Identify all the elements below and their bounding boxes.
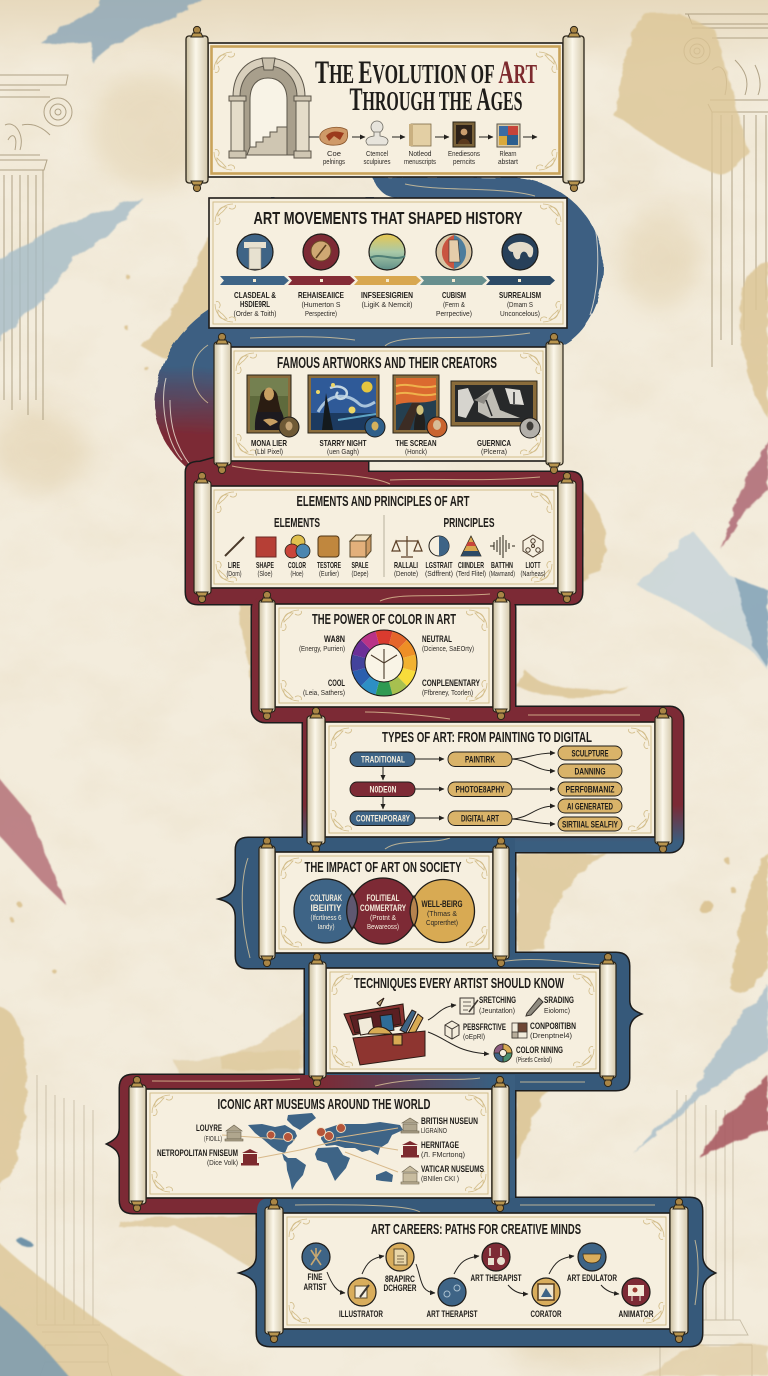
museum labels [157, 1116, 484, 1183]
heading: ART CAREERS: PATHS FOR CREATIVE MINDS [371, 1221, 581, 1238]
scroll roller left [129, 1076, 146, 1212]
scroll roller right [558, 472, 576, 603]
heading: FAMOUS ARTWORKS AND THEIR CREATORS [277, 355, 497, 372]
heading: THE POWER OF COLOR IN ART [312, 611, 456, 628]
career labels [304, 1272, 654, 1319]
heading: TECHNIQUES EVERY ARTIST SHOULD KNOW [354, 975, 565, 992]
movement labels: CLASDEAL & [234, 290, 276, 300]
museum labels: BRITISH NUSEUN [421, 1116, 478, 1127]
heading: ART MOVEMENTS THAT SHAPED HISTORY [254, 208, 523, 228]
technique labels: PEBSFRCTIVE [463, 1022, 506, 1032]
era labels: menuscripts [404, 159, 436, 166]
movement labels: (Humerton S [302, 302, 341, 309]
principle icons [392, 535, 543, 558]
color temperature labels [299, 634, 480, 697]
artwork labels: MONA LIER [251, 438, 287, 448]
element and principle labels: (Sloe) [258, 571, 272, 578]
artwork: Guernica [451, 381, 537, 426]
heading: TYPES OF ART: FROM PAINTING TO DIGITAL [382, 729, 592, 746]
icon: sketching [460, 998, 478, 1014]
venn labels: (Protnt & [370, 915, 396, 922]
scroll roller left [259, 837, 275, 967]
panel: art movements [209, 198, 567, 328]
node: art therapist alt [482, 1243, 510, 1271]
element and principle labels: (Depe) [352, 571, 368, 578]
flowchart: era labels: CONTENPORA8Y [356, 814, 410, 824]
ribbon: winding path behind panels [108, 184, 714, 1346]
icon: surrealist melting form [502, 234, 538, 270]
era labels: pelnings [323, 159, 345, 166]
venn labels: Cqprerthet) [426, 920, 458, 927]
icon: Vatican building [401, 1166, 419, 1184]
venn labels: COMMERTARY [360, 903, 406, 913]
element and principle labels: (Dom) [226, 571, 242, 578]
venn labels [310, 893, 462, 931]
technique labels [463, 995, 576, 1064]
column: top right [684, 14, 768, 367]
element and principle labels: COLOR [288, 560, 306, 570]
technique labels: (Pisetls Cenbol) [516, 1057, 552, 1064]
career labels: CORATOR [530, 1309, 562, 1319]
element icons [225, 535, 371, 558]
flowchart: medium labels: PHOTOE8APHY [456, 784, 504, 794]
artwork labels: STARRY NIGHT [320, 438, 367, 448]
flowchart: era labels [356, 754, 410, 824]
venn labels: FOLITIEAL [366, 893, 400, 903]
color temperature labels: WA8N [324, 634, 345, 645]
flowchart: medium labels: SCULPTURE [572, 748, 608, 758]
flowchart: medium labels [456, 748, 618, 830]
era labels: Enediesons [448, 151, 480, 158]
scroll roller right [493, 591, 510, 720]
icon: open art toolbox [344, 998, 425, 1065]
scroll roller right [563, 26, 584, 192]
movement labels: Unconcelous) [500, 311, 540, 318]
icon: classical bust [366, 121, 388, 145]
icon: impressionist landscape [369, 234, 405, 270]
chart: color wheel [347, 626, 421, 700]
icon: renaissance portrait [453, 122, 475, 147]
panel: types of art [307, 707, 672, 853]
icon: Hermitage building [401, 1141, 419, 1158]
venn labels: Bewareoss) [367, 924, 399, 931]
scroll roller right [546, 333, 563, 474]
era labels: Notleod [408, 151, 432, 158]
column: bottom left [37, 1075, 112, 1376]
movement labels: (Order & Toith) [234, 311, 276, 318]
flowchart: medium labels: DIGITAL ART [461, 814, 499, 824]
movement labels [234, 290, 541, 318]
panel: art careers [265, 1198, 688, 1343]
element and principle labels: SPALE [352, 560, 369, 570]
artwork labels: (Plcerra) [481, 449, 507, 456]
panel: impact on society [259, 837, 509, 967]
panel: elements and principles [194, 472, 576, 603]
scroll roller left [307, 707, 325, 853]
arrows between eras [309, 136, 537, 138]
icon: classical column [237, 234, 273, 270]
flowchart: medium labels: PAINTIRK [465, 754, 495, 764]
movement labels: SURREALISM [499, 290, 541, 300]
career labels: 8RAPIRC [385, 1274, 415, 1284]
panel: famous artworks [214, 333, 563, 474]
chart: overlapping venn circles [294, 878, 474, 944]
museum labels: (FIOILL) [204, 1136, 222, 1143]
artist portrait medallions [279, 417, 540, 438]
technique labels: SRADING [544, 995, 574, 1005]
technique labels: (Jeuntatlon) [479, 1008, 515, 1015]
ribbon: brushed blue and maroon swoosh [155, 177, 603, 472]
element and principle labels: (Narheas) [520, 571, 546, 578]
movement labels: CUBISM [442, 290, 466, 300]
icon: perspective cube [445, 1021, 459, 1039]
column: top left [0, 75, 72, 420]
color temperature labels: (Energy, Purrien) [299, 646, 345, 653]
element and principle labels: CIIINDLER [458, 560, 484, 570]
node: curator [532, 1278, 560, 1306]
flowchart: era labels: TRADITIONAL [361, 754, 405, 764]
artwork: Mona Lisa [247, 375, 291, 433]
technique labels: CONPO8ITIBN [530, 1021, 576, 1031]
venn labels: Iandy) [318, 924, 334, 931]
career labels: ILLUSTRATOR [339, 1309, 383, 1319]
node: art educator [578, 1243, 606, 1271]
artwork labels [251, 438, 511, 456]
artwork labels: (uen Gagh) [327, 449, 359, 456]
flowchart: medium labels: PERF0BMANIZ [566, 784, 615, 794]
element and principle labels: (Mavmand) [489, 571, 515, 578]
flowchart arrows [383, 753, 555, 824]
flowchart: medium labels: SIRTIIAL SEALFIY [562, 820, 618, 830]
element and principle labels: LIRE [228, 560, 240, 570]
career labels: ART EDULATOR [567, 1273, 617, 1283]
movement labels: INFSEESIGRIEN [361, 290, 413, 300]
icon: shading pencil [526, 998, 543, 1016]
flowchart: medium pills [448, 746, 622, 831]
element and principle labels: (Eurlier) [319, 571, 339, 578]
panel: title banner [186, 26, 584, 192]
timeline arrow band [220, 276, 555, 285]
map connection lines [222, 1128, 398, 1172]
timeline: art through the ages [309, 121, 537, 166]
element and principle labels [226, 560, 546, 578]
venn labels: (Thmas & [427, 911, 457, 918]
career labels: DCHGRER [384, 1283, 417, 1293]
artwork labels: (Lbl Pixel) [255, 449, 283, 456]
icon: modern abstract [497, 124, 520, 147]
scroll roller right [493, 837, 509, 967]
node: animator [622, 1278, 650, 1306]
element and principle labels: TESTORE [317, 560, 341, 570]
venn labels: COLTURAK [310, 893, 342, 903]
movement labels: Perspectire) [305, 311, 337, 318]
technique labels: Eiolomc) [544, 1008, 570, 1015]
icon: medieval manuscript [409, 124, 431, 146]
career labels: ART THERAPIST [470, 1273, 522, 1283]
flowchart: medium labels: DANNING [574, 766, 606, 776]
scroll roller left [194, 472, 211, 603]
career path arrows [327, 1256, 619, 1294]
heading: THE IMPACT OF ART ON SOCIETY [304, 859, 462, 876]
heading: main title: THE EVOLUTION OF ART [315, 55, 537, 91]
venn labels: (Ifcrtlness 6 [310, 915, 342, 922]
era labels: sculpiures [364, 159, 391, 166]
career labels: ANIMATOR [618, 1309, 654, 1319]
element and principle labels: BATTHN [491, 560, 513, 570]
icon: Metropolitan building [241, 1149, 259, 1166]
museum labels: VATICAR NUSEUMS [421, 1164, 484, 1175]
technique labels: (oEpRl) [463, 1034, 485, 1041]
technique labels: SRETCHING [479, 995, 516, 1005]
scroll roller left [186, 26, 208, 192]
movement labels: Perrpective) [436, 311, 472, 318]
artwork: Starry Night [308, 375, 379, 433]
scroll roller left [214, 333, 231, 474]
color temperature labels: CONPLENENTARY [422, 678, 480, 689]
sub heading: principles: PRINCIPLES [444, 515, 495, 530]
career labels: FINE [308, 1272, 322, 1282]
scroll roller right [655, 707, 672, 853]
movement labels: (LigiK & Nemcit) [362, 302, 412, 309]
technique labels: (Drenptnel4) [530, 1033, 572, 1040]
icon: cubist face [436, 234, 472, 270]
movement labels: HSDIE9RL [240, 299, 270, 309]
artwork labels: THE SCREAN [396, 438, 436, 448]
career labels: ARTIST [304, 1282, 327, 1292]
technique labels: COLOR NINING [516, 1045, 563, 1055]
scroll roller left [309, 953, 326, 1087]
element and principle labels: RALLALI [394, 560, 418, 570]
color temperature labels: COOL [328, 678, 345, 689]
icon: Louvre building [225, 1125, 243, 1141]
scroll roller right [600, 953, 616, 1087]
era labels: Coe [327, 151, 341, 158]
flowchart: era labels: N0DE0N [370, 784, 396, 794]
museum labels: HERNITAGE [421, 1140, 459, 1151]
heading: main title [315, 55, 537, 118]
career labels: ART THERAPIST [426, 1309, 478, 1319]
icon: British Museum building [401, 1118, 419, 1133]
heading: ICONIC ART MUSEUMS AROUND THE WORLD [218, 1096, 431, 1113]
node: illustrator [348, 1278, 376, 1306]
movement labels: (Dmam S [507, 302, 533, 309]
scroll roller right [670, 1198, 688, 1343]
technique arrows [428, 1005, 489, 1054]
sub heading: elements: ELEMENTS [274, 515, 320, 530]
museum labels: (Dice Volk) [207, 1160, 238, 1167]
map location pins [267, 1124, 346, 1142]
era labels: abstart [498, 159, 518, 166]
color temperature labels: NEUTRAL [422, 634, 452, 645]
scroll roller left [265, 1198, 283, 1343]
museum labels: (BNIlen CKI ) [421, 1176, 459, 1183]
museum labels: (Л. FMcrtonq) [421, 1152, 465, 1159]
chart: world map [248, 1113, 403, 1190]
artwork: The Scream [393, 375, 439, 433]
color temperature labels: (Leia, Sathers) [303, 690, 345, 697]
movement labels: (Ferm & [443, 302, 465, 309]
element and principle labels: (Sdffrent) [425, 571, 453, 578]
venn labels: WELL-BEIRG [422, 899, 462, 909]
venn labels: IBEIITIY [310, 903, 342, 913]
panel: museums [129, 1076, 509, 1212]
era labels: Rlearn [500, 151, 517, 158]
era labels: Ctemcel [366, 151, 388, 158]
heading: ELEMENTS AND PRINCIPLES OF ART [296, 493, 470, 510]
element and principle labels: SHAPE [256, 560, 274, 570]
icon: renaissance compass [303, 234, 339, 270]
heading: main title: THROUGH THE AGES [350, 82, 523, 118]
icon: color mixing palette [494, 1044, 512, 1062]
museum labels: LlGRAlNO [421, 1128, 447, 1135]
era labels: perncits [453, 159, 475, 166]
icon: stone archway [229, 58, 311, 158]
museum labels: LOUYRE [196, 1123, 222, 1134]
scroll roller left [259, 591, 275, 720]
color temperature labels: (Ffbreney, Tcorlen) [422, 690, 473, 697]
panel: power of color [259, 591, 510, 720]
color temperature labels: (Dcience, SaEOrty) [422, 646, 474, 653]
artwork labels: (Honck) [405, 449, 427, 456]
flowchart: medium labels: AI GENERATED [567, 802, 613, 812]
icon: composition grid [512, 1023, 527, 1038]
column: bottom right [660, 1090, 752, 1376]
node: art therapist [438, 1278, 466, 1306]
artwork labels: GUERNICA [477, 438, 511, 448]
element and principle labels: (Terd Flitel) [456, 571, 486, 578]
flowchart: era pills [350, 752, 415, 826]
element and principle labels: LIOTT [526, 560, 541, 570]
museum labels: NETROPOLITAN FNISEUM [157, 1148, 238, 1159]
element and principle labels: (Denote) [394, 571, 418, 578]
panel: techniques [309, 953, 616, 1087]
icon: cave painting [320, 127, 348, 145]
element and principle labels: LGSTRAIT [426, 560, 453, 570]
node: fine artist [302, 1243, 330, 1271]
node: graphic designer [386, 1243, 414, 1271]
element and principle labels: (Hoe) [290, 571, 304, 578]
era labels [323, 151, 518, 166]
scroll roller right [492, 1076, 509, 1212]
movement labels: REHAISEAIICE [298, 290, 344, 300]
